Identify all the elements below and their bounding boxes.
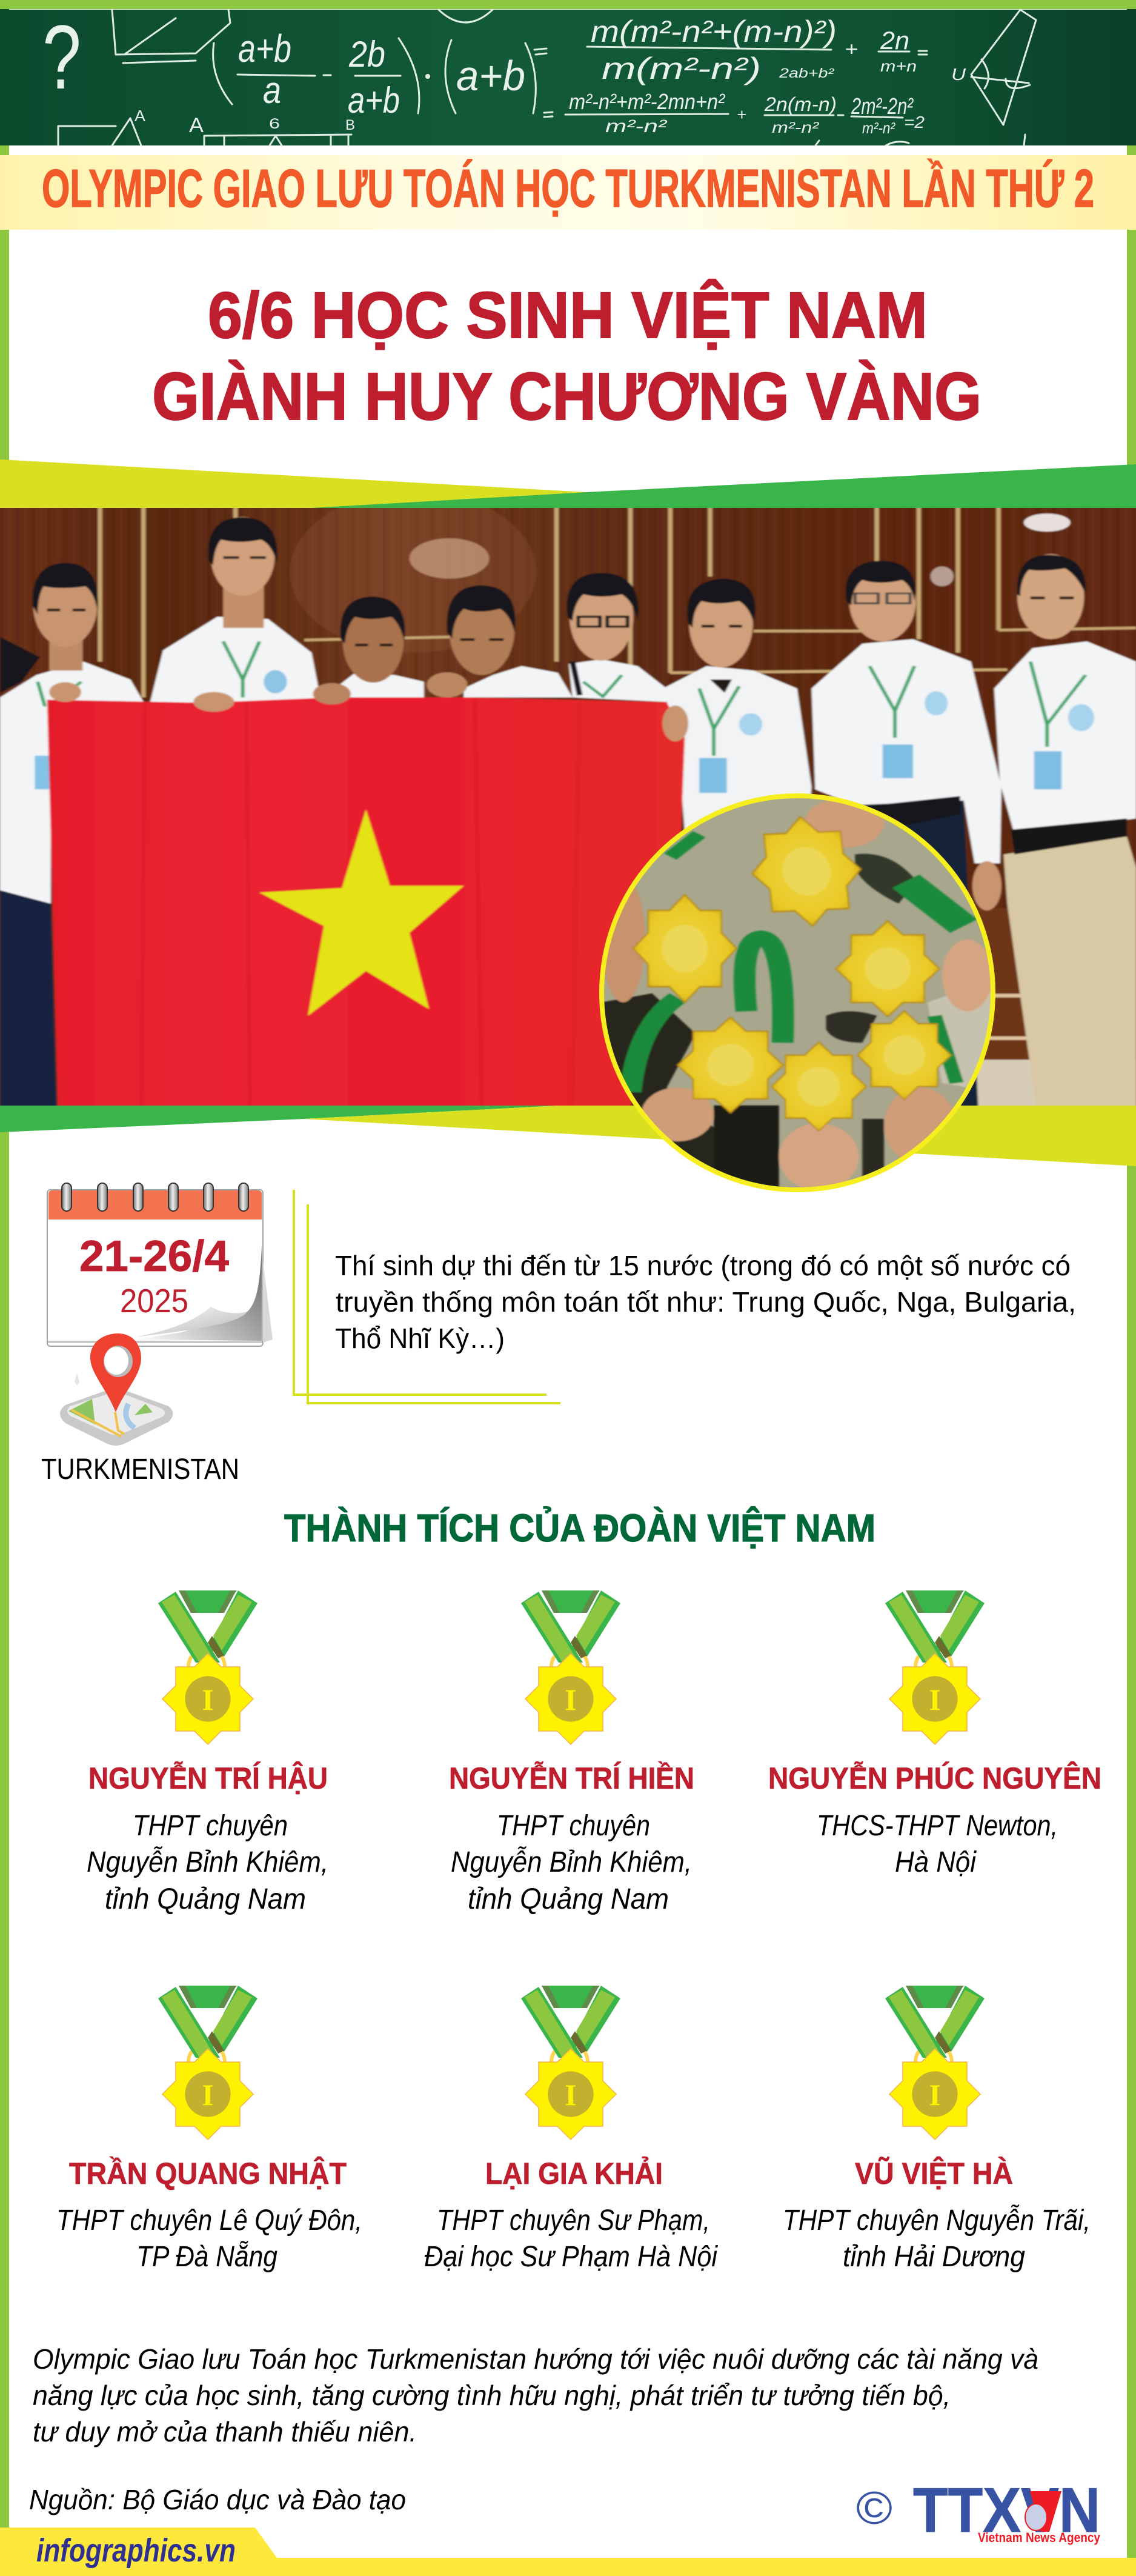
year: 2025 — [120, 1282, 188, 1320]
chalk: second equation row: 2n(m-n) — [764, 93, 837, 115]
school: TP Đà Nẵng — [136, 2241, 277, 2273]
gold wall mouldings — [100, 505, 1136, 698]
closing paragraph: tư duy mở của thanh thiếu niên. — [33, 2416, 417, 2448]
location map icon — [60, 1333, 173, 1446]
school — [817, 1810, 1058, 1878]
calendar header — [48, 1190, 262, 1220]
student card: Nguyễn Trí Hiền — [449, 1590, 694, 1915]
staircase — [977, 907, 1028, 1059]
TTXVN logo: TTXVN — [913, 2475, 1100, 2546]
school: tỉnh Quảng Nam — [105, 1883, 306, 1915]
person 3 — [340, 596, 424, 698]
person 4 — [447, 586, 573, 698]
student card: Lại Gia Khải — [424, 1986, 718, 2273]
source line: Nguồn: Bộ Giáo dục và Đào tạo — [29, 2484, 406, 2515]
chalk: bottom left sketches: B — [345, 117, 355, 133]
person 2 — [150, 517, 321, 704]
chalk: first fraction — [237, 27, 400, 121]
chalk: large fraction: m(m²-n²) — [602, 52, 761, 85]
intro text: truyền thống môn toán tốt như: Trung Quốc, Nga, Bulgaria, — [336, 1286, 1076, 1318]
icon: medal — [885, 1986, 985, 2140]
school — [424, 2204, 718, 2273]
icon: medal — [158, 1986, 257, 2140]
chalk: large fraction — [587, 15, 927, 85]
hands — [805, 798, 884, 847]
school: THPT chuyên Sư Phạm, — [437, 2204, 710, 2237]
Vietnamese flag — [47, 672, 688, 1107]
person 1 — [0, 563, 144, 1107]
six gold medals — [746, 815, 867, 929]
intro text: Thổ Nhĩ Kỳ…) — [335, 1323, 505, 1354]
chalk: second equation row: m²-n² — [772, 118, 820, 136]
chalk: bottom left sketches: A — [189, 114, 204, 137]
icon: medal — [521, 1986, 620, 2140]
chalk: large fraction: + — [845, 38, 858, 60]
student card: Nguyễn Phúc Nguyên — [768, 1590, 1101, 1878]
map pin — [90, 1333, 141, 1412]
chalk: bottom left sketches: A — [135, 107, 146, 125]
title band — [0, 155, 1136, 230]
sparkle — [75, 1373, 79, 1386]
top green strip — [0, 0, 1136, 9]
chalk: cube sketch — [112, 10, 230, 63]
person 5 — [566, 573, 666, 702]
main title: 6/6 HỌC SINH VIỆT NAM — [208, 278, 928, 352]
school: THPT chuyên Nguyễn Trãi, — [783, 2204, 1091, 2237]
school — [87, 1810, 328, 1915]
chalk: triangle diagram — [951, 10, 1036, 125]
calendar rings — [62, 1183, 248, 1211]
name: LẠI GIA KHẢI — [485, 2157, 663, 2191]
icon: medal: I — [929, 1683, 941, 1717]
man 7 — [812, 561, 1001, 1107]
school: Đại học Sư Phạm Hà Nội — [424, 2241, 718, 2273]
right side bar — [1127, 0, 1136, 2559]
chalk: bottom left sketches: 6 — [269, 116, 280, 132]
school: Nguyễn Bỉnh Khiêm, — [87, 1846, 328, 1878]
chalk: second equation row: m²-n² — [605, 116, 667, 136]
school — [783, 2204, 1091, 2273]
main title — [152, 278, 982, 434]
student card: Trần Quang Nhật — [56, 1986, 362, 2273]
school — [451, 1810, 692, 1915]
closing paragraph — [33, 2343, 1038, 2448]
school: tỉnh Quảng Nam — [468, 1883, 669, 1915]
chalk: large fraction: 2n — [880, 26, 909, 55]
chalk: second equation row: m²-n² — [862, 119, 895, 137]
name: NGUYỄN PHÚC NGUYÊN — [768, 1761, 1101, 1795]
school: Hà Nội — [895, 1846, 977, 1878]
left side bar — [0, 0, 9, 2559]
chalk: second equation row: m²-n²+m²-2mn+n² — [569, 89, 726, 114]
location label: TURKMENISTAN — [41, 1453, 239, 1486]
green ribbons — [745, 937, 783, 1043]
school: Nguyễn Bỉnh Khiêm, — [451, 1846, 692, 1878]
date: 21-26/4 — [79, 1232, 229, 1281]
name: NGUYỄN TRÍ HẬU — [88, 1761, 328, 1795]
chalk: first fraction: a+b — [348, 80, 400, 121]
school: THPT chuyên Lê Quý Đôn, — [56, 2204, 362, 2237]
chalk: top arc — [439, 10, 493, 22]
school — [56, 2204, 362, 2273]
icon: medal: I — [202, 2078, 214, 2112]
school: THCS-THPT Newton, — [817, 1810, 1058, 1842]
icon: medal: I — [929, 2078, 941, 2112]
student card: Vũ Việt Hà — [783, 1986, 1091, 2273]
icon: medal: I — [565, 1683, 577, 1717]
wood wall — [0, 505, 1136, 1115]
copyright mark: © — [856, 2483, 892, 2534]
team photo — [0, 491, 1136, 1115]
chalk: parentheses — [213, 38, 546, 113]
icon: medal — [158, 1590, 257, 1744]
icon: medal — [885, 1590, 985, 1744]
chalk: question mark: ? — [42, 6, 81, 108]
chalk: second equation row — [544, 89, 925, 137]
chalk: large fraction: 2ab+b² — [779, 65, 834, 81]
icon: medal — [521, 1590, 620, 1744]
calendar icon — [47, 1183, 273, 1346]
chalk: second equation row: + — [737, 105, 746, 124]
icon: medal: I — [202, 1683, 214, 1717]
main title: GIÀNH HUY CHƯƠNG VÀNG — [152, 359, 982, 434]
intro text — [335, 1250, 1076, 1354]
chalk: second equation row: =2 — [904, 113, 925, 132]
upper wedge divider — [0, 459, 1136, 508]
closing paragraph: Olympic Giao lưu Toán học Turkmenistan hướng tới việc nuôi dưỡng các tài năng và — [33, 2343, 1038, 2375]
man 8 — [994, 554, 1136, 1107]
chalk: first fraction: a — [263, 70, 281, 112]
chalkboard banner — [0, 6, 1136, 145]
chalk: a+b: a+b — [456, 52, 525, 99]
school: THPT chuyên — [497, 1810, 650, 1842]
flag star — [259, 810, 463, 1016]
closing paragraph: năng lực của học sinh, tăng cường tình hữu nghị, phát triển tư tưởng tiến bộ, — [33, 2380, 951, 2411]
chalk: second equation row: 2m²-2n² — [851, 94, 914, 119]
bottom yellow footer — [0, 2528, 1136, 2576]
chalk: large fraction: m+n — [880, 57, 917, 75]
website: infographics.vn — [36, 2532, 236, 2569]
student card: Nguyễn Trí Hậu — [87, 1590, 328, 1915]
school: THPT chuyên — [133, 1810, 288, 1842]
chalk: first fraction: a+b — [238, 27, 291, 70]
section heading: THÀNH TÍCH CỦA ĐOÀN VIỆT NAM — [284, 1506, 875, 1550]
circular inset: gold medals — [602, 796, 993, 1190]
school: tỉnh Hải Dương — [843, 2241, 1025, 2273]
intro text: Thí sinh dự thi đến từ 15 nước (trong đó có một số nước có — [335, 1250, 1071, 1281]
chalk: bottom left sketches — [58, 107, 355, 145]
agency tagline: Vietnam News Agency — [978, 2530, 1101, 2545]
map base — [60, 1388, 173, 1446]
chalk: first fraction: 2b — [348, 34, 385, 75]
chalk: triangle diagram: U — [951, 65, 966, 84]
person 6 — [663, 579, 812, 832]
name: TRẦN QUANG NHẬT — [69, 2157, 347, 2191]
name: NGUYỄN TRÍ HIỀN — [449, 1761, 694, 1795]
chalk: large fraction: m(m²-n²+(m-n)²) — [591, 15, 837, 48]
text frame lines — [294, 1190, 560, 1403]
lower wedge divider — [0, 1106, 1136, 1166]
dark floor corners — [604, 993, 715, 1169]
calendar page curl — [136, 1244, 262, 1341]
name: VŨ VIỆT HÀ — [855, 2156, 1013, 2191]
icon: medal: I — [565, 2078, 577, 2112]
